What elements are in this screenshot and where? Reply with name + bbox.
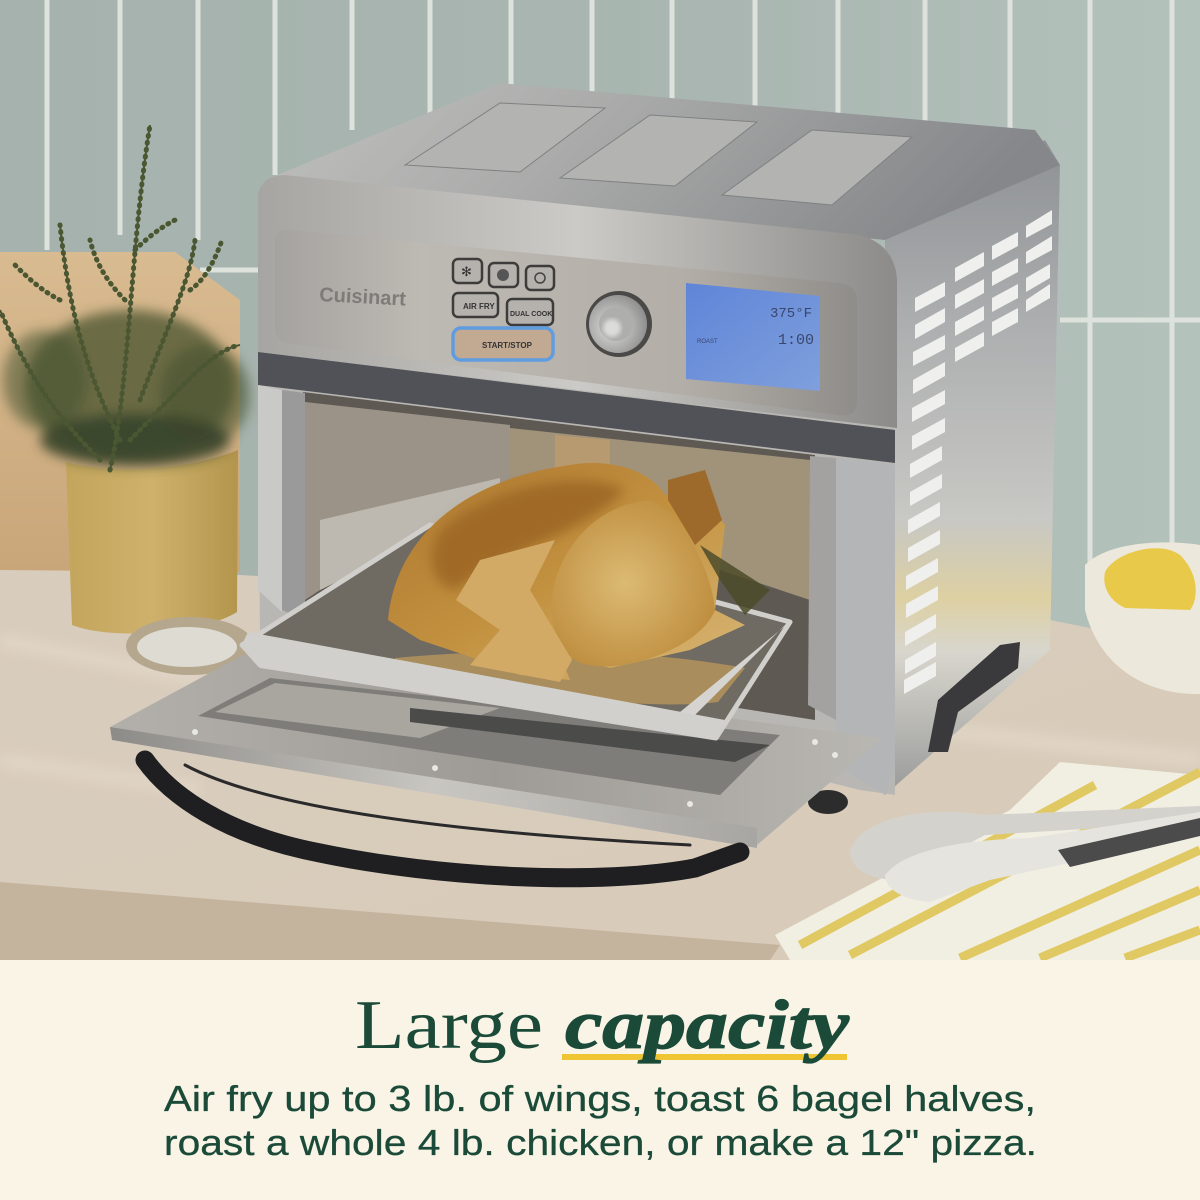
buttons: START/STOP (482, 341, 533, 350)
display: 375°F (770, 306, 812, 322)
photo: salt dish (126, 617, 254, 675)
oven top with recessed vents (270, 83, 1060, 240)
oven foot (808, 790, 848, 814)
roast chicken (388, 463, 770, 682)
buttons (453, 259, 554, 360)
caption panel (0, 960, 1200, 1200)
door handle (145, 760, 740, 878)
product: air fryer oven (110, 83, 1060, 878)
photo: striped towel (775, 762, 1200, 960)
buttons: DUAL COOK (510, 311, 552, 318)
photo: kitchen background wall (0, 0, 1200, 640)
photo: kitchen tongs (850, 806, 1200, 902)
title (355, 987, 850, 1064)
door (110, 655, 882, 848)
photo: stone countertop (0, 568, 1200, 960)
photo: thyme plant (0, 125, 250, 470)
oven right side with vents (885, 140, 1060, 795)
dial (586, 291, 652, 357)
title: Large (355, 987, 543, 1064)
display: 1:00 (778, 332, 814, 349)
rear carry handle (928, 642, 1020, 752)
photo: yellow pot (66, 450, 238, 634)
description (164, 1078, 1037, 1163)
buttons: ✻ (461, 265, 472, 280)
buttons: AIR FRY (463, 302, 495, 311)
control panel (275, 230, 857, 415)
photo: bowl with lemons (1085, 542, 1200, 694)
baking tray (242, 525, 790, 738)
oven cavity (258, 352, 895, 795)
display: ROAST (697, 339, 718, 345)
highlight underline (562, 1054, 847, 1060)
oven front fascia (258, 175, 897, 428)
title: capacity (565, 987, 850, 1064)
description: Air fry up to 3 lb. of wings, toast 6 bagel halves, (164, 1078, 1036, 1119)
display (686, 283, 820, 391)
description: roast a whole 4 lb. chicken, or make a 12" pizza. (164, 1122, 1037, 1163)
photo: cutting board (0, 252, 240, 572)
brand logo: Cuisinart (319, 284, 407, 311)
